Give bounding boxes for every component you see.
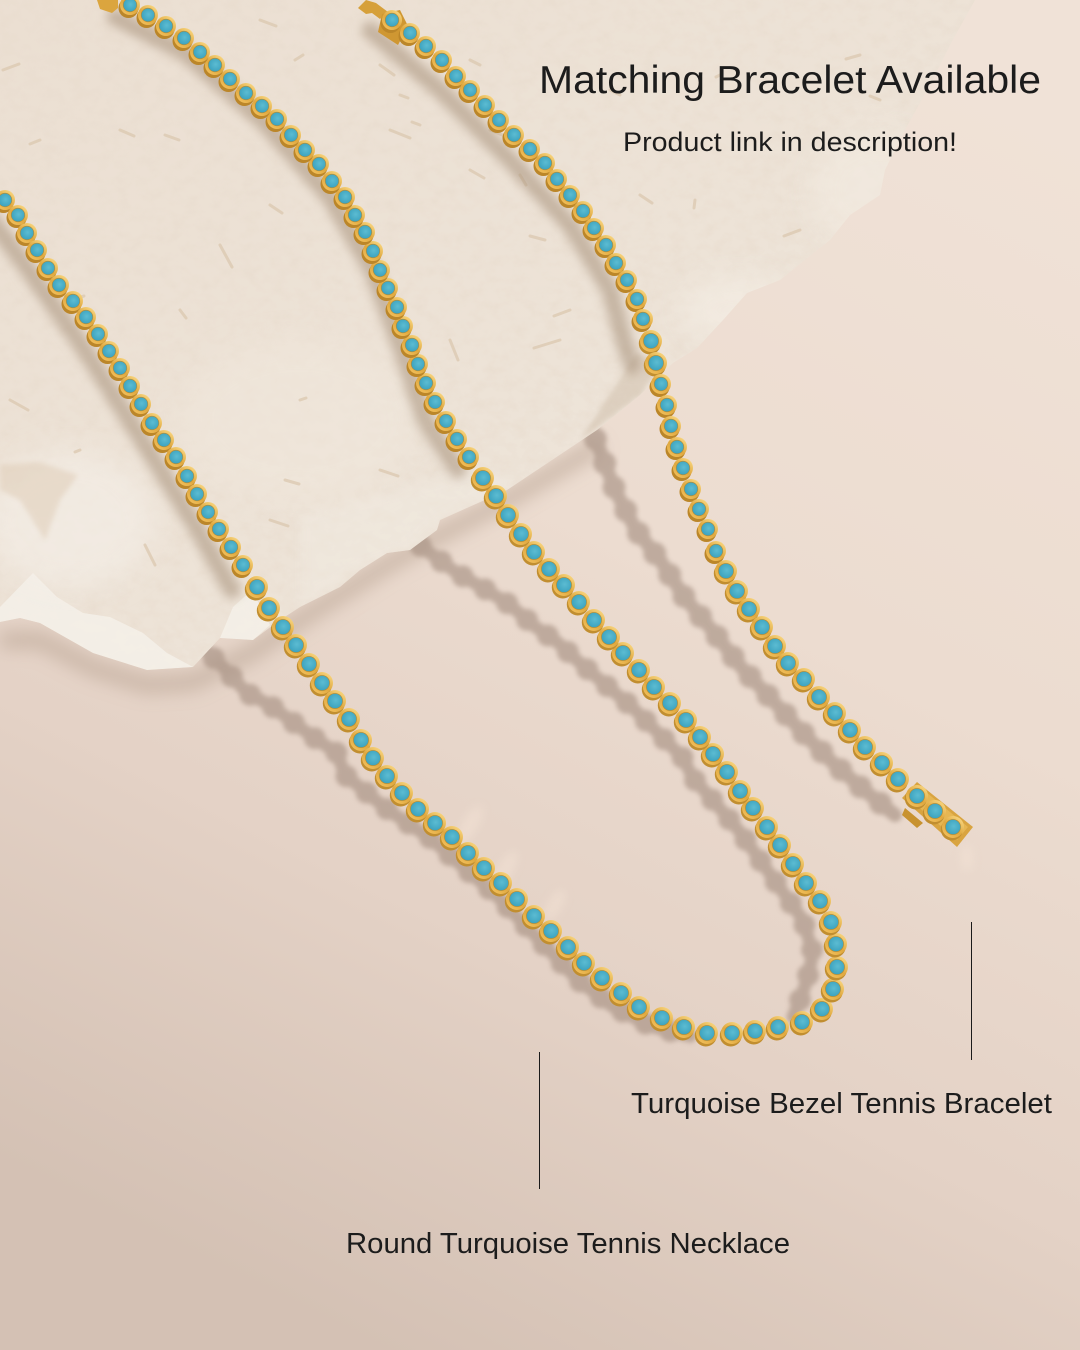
floor shadow of necklace lower strand <box>195 640 690 1036</box>
subheading: product link: Product link in description! <box>623 127 957 157</box>
floor shadow of bracelet <box>585 415 895 815</box>
necklace: right strand <box>118 0 848 1002</box>
callout label: necklace: Round Turquoise Tennis Necklace <box>346 1228 790 1260</box>
shadows of chains on stone <box>0 17 632 590</box>
bracelet clasp: bottom end <box>902 782 973 847</box>
bracelet strand <box>380 10 964 840</box>
necklace: upper section clasp <box>97 0 118 13</box>
callout line: bracelet <box>971 922 972 1060</box>
soft shadow under stone edge <box>0 445 600 685</box>
callout label: bracelet: Turquoise Bezel Tennis Bracelet <box>631 1088 1052 1120</box>
callout line: necklace <box>539 1052 540 1189</box>
stone slab <box>0 18 887 670</box>
bracelet clasp: top end <box>358 0 408 45</box>
reflected light on floor <box>452 802 973 924</box>
necklace: left strand <box>0 190 833 1046</box>
floor shadow of necklace right strand <box>400 530 813 1017</box>
heading: matching bracelet: Matching Bracelet Available <box>539 59 1041 102</box>
